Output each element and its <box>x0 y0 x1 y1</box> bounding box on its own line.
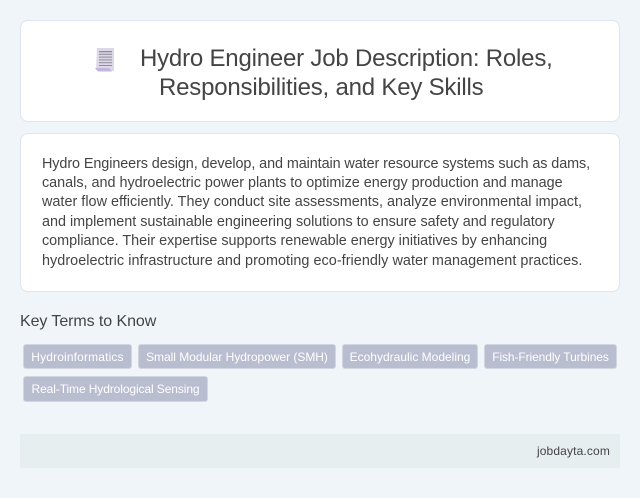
tag: ecohydraulic modeling <box>342 344 478 369</box>
footer bar <box>20 434 620 468</box>
tag: ecohydraulic modeling: Ecohydraulic Modeling <box>350 350 470 364</box>
panel: title card <box>20 20 620 122</box>
tag: fish-friendly turbines: Fish-Friendly Turbines <box>492 350 609 364</box>
tag: small modular hydropower <box>138 344 336 369</box>
footer text: jobdayta.com <box>537 444 610 458</box>
title: Hydro Engineer Job Description: Roles, <box>140 45 553 72</box>
text block: description: Hydro Engineers design, develop, and maintain water resource systems such as dams, <box>42 156 590 172</box>
title <box>140 45 553 101</box>
text block: description: hydroelectric infrastructure and promoting eco-friendly water management practices. <box>42 253 582 269</box>
tag: small modular hydropower: Small Modular Hydropower (SMH) <box>146 350 328 364</box>
tag list <box>23 344 617 402</box>
tag: hydroinformatics <box>23 344 132 369</box>
tag: real-time hydrological sensing <box>23 376 208 402</box>
text block: description: canals, and hydroelectric power plants to optimize energy production and manage <box>42 175 563 191</box>
text block: description: and implement sustainable engineering solutions to ensure safety and regulatory <box>42 214 555 230</box>
tag: hydroinformatics: Hydroinformatics <box>31 350 124 364</box>
tag: real-time hydrological sensing: Real-Time Hydrological Sensing <box>32 382 199 396</box>
tag: fish-friendly turbines <box>484 344 617 369</box>
heading: key terms: Key Terms to Know <box>20 313 156 330</box>
text block: description <box>42 156 590 269</box>
panel: description <box>20 133 620 292</box>
text block: description: water flow efficiently. They conduct site assessments, analyze environmental impact, <box>42 194 582 210</box>
text block: description: compliance. Their expertise supports renewable energy initiatives by enhancing <box>42 233 547 249</box>
title: Responsibilities, and Key Skills <box>159 74 483 101</box>
icon: document scroll <box>95 48 114 72</box>
